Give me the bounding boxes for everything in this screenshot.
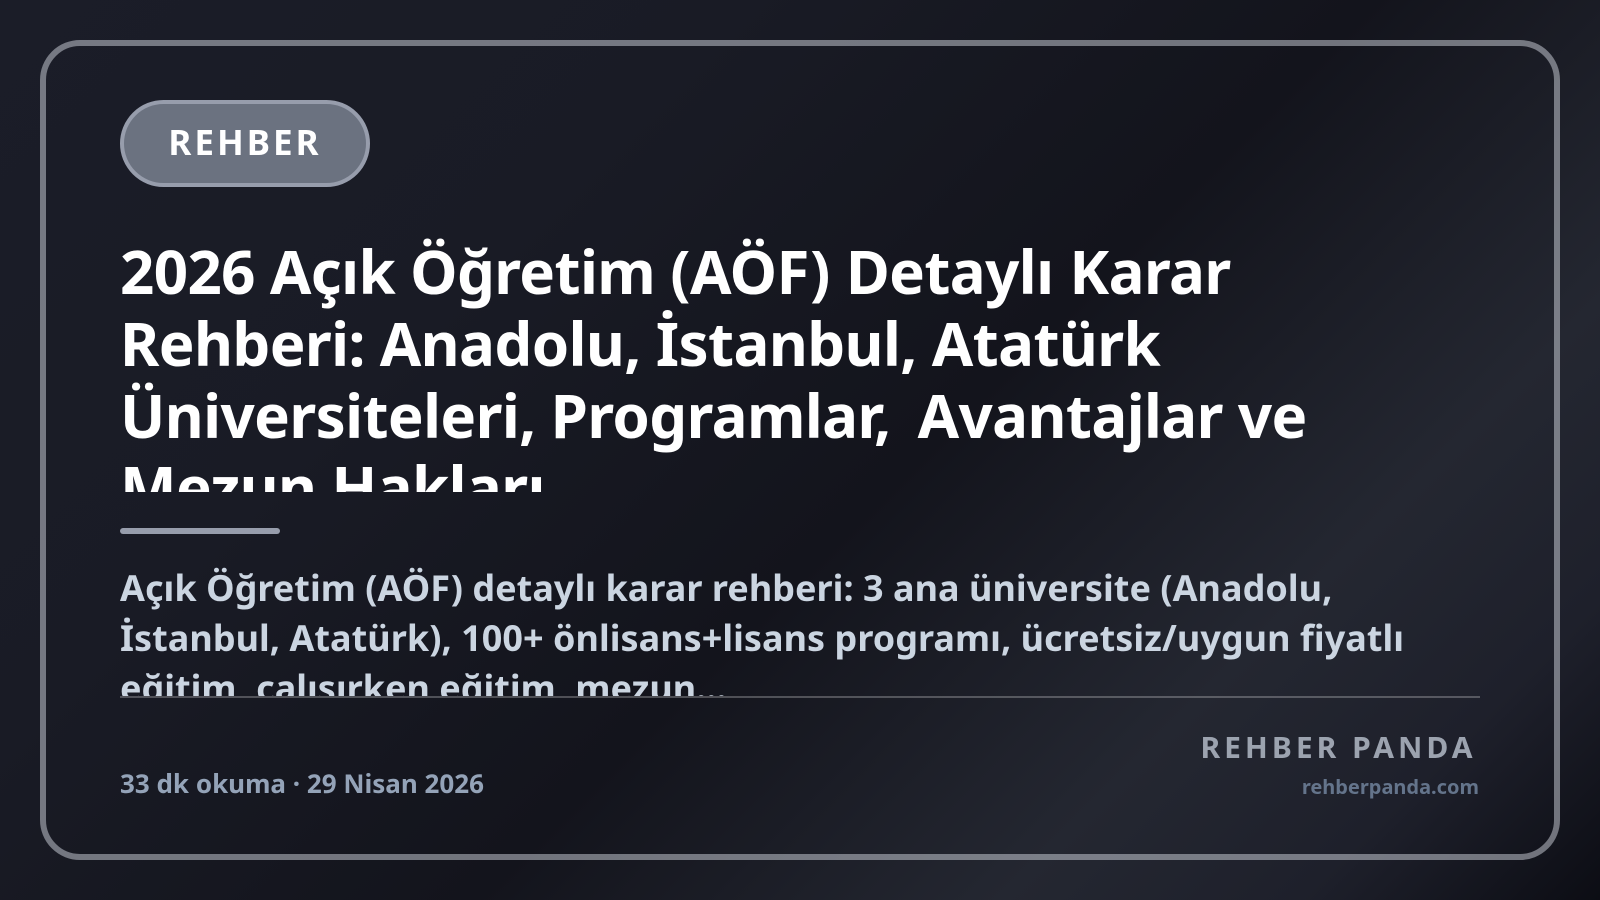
footer meta: reading time and date: 33 dk okuma · 29 Nisan 2026 [120, 765, 484, 801]
brand url: rehberpanda.com [1302, 773, 1479, 800]
badge: REHBER: REHBER [168, 119, 322, 166]
badge: REHBER [120, 100, 370, 187]
brand name: REHBER PANDA [1200, 726, 1476, 767]
footer rule [120, 696, 1480, 698]
accent divider [120, 528, 280, 534]
